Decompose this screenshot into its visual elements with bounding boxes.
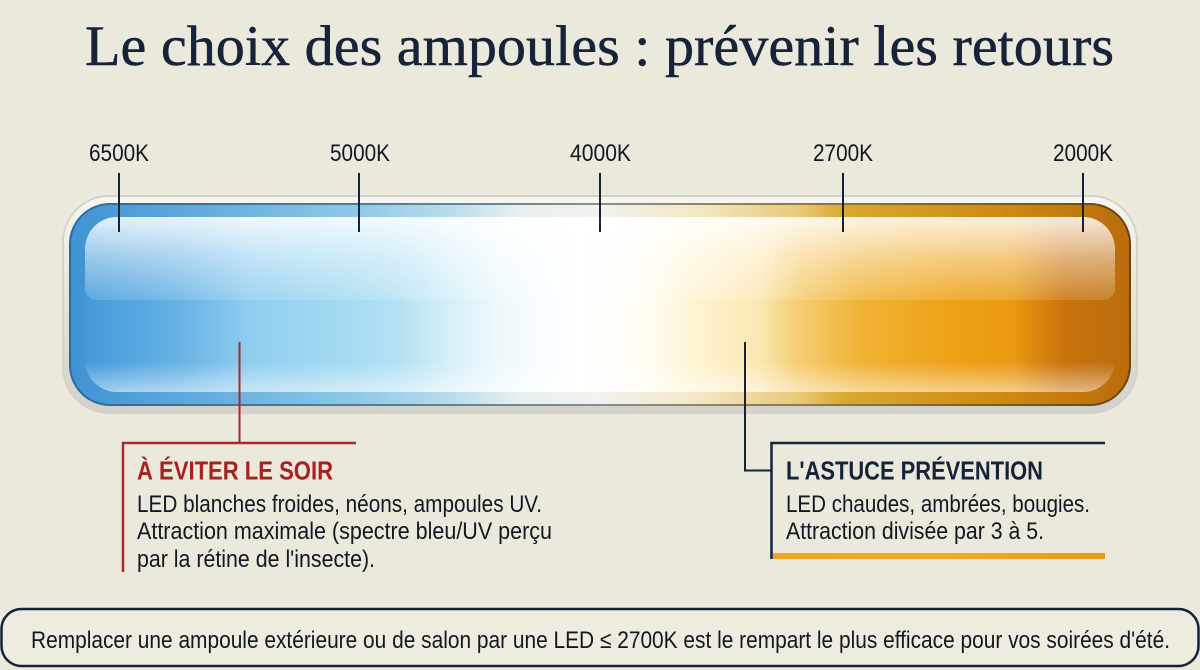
tick 6500K <box>89 140 149 232</box>
tick 2700K: 2700K <box>813 140 873 167</box>
tick 2700K <box>813 140 873 232</box>
tick 5000K <box>330 140 390 232</box>
red body text: par la rétine de l'insecte). <box>137 546 375 573</box>
navy heading: L'ASTUCE PRÉVENTION <box>786 456 1043 486</box>
red bracket <box>123 443 356 572</box>
tick 2000K: 2000K <box>1053 140 1113 167</box>
navy body text: LED chaudes, ambrées, bougies. <box>786 491 1090 518</box>
banner frame <box>2 609 1198 666</box>
red body text: Attraction maximale (spectre bleu/UV perçu <box>137 518 552 545</box>
tick 2000K <box>1053 140 1113 232</box>
navy connector <box>745 342 771 470</box>
bar coloured edge <box>70 204 1130 405</box>
red body text: LED blanches froides, néons, ampoules UV. <box>137 491 542 518</box>
tick 4000K: 4000K <box>570 140 631 167</box>
callout: l'astuce prévention <box>745 342 1105 559</box>
tick 6500K: 6500K <box>89 140 149 167</box>
red heading: À ÉVITER LE SOIR <box>137 456 333 486</box>
bar outer frame <box>63 196 1137 413</box>
red connector <box>238 342 240 443</box>
bar gloss highlight <box>85 217 1115 300</box>
temperature scale <box>89 140 1113 232</box>
red body text <box>137 491 552 573</box>
callout: à éviter le soir <box>123 342 552 573</box>
navy bracket <box>772 443 1105 559</box>
amber underline <box>773 553 1105 559</box>
bottom takeaway banner <box>2 609 1198 666</box>
navy body text <box>786 491 1090 545</box>
title: Le choix des ampoules : prévenir les retours <box>85 15 1114 78</box>
bar core gradient <box>85 217 1115 392</box>
tick 5000K: 5000K <box>330 140 390 167</box>
navy body text: Attraction divisée par 3 à 5. <box>786 518 1044 545</box>
bar lower glow <box>85 362 1115 392</box>
spectrum bar <box>63 196 1137 413</box>
tick 4000K <box>570 140 631 232</box>
